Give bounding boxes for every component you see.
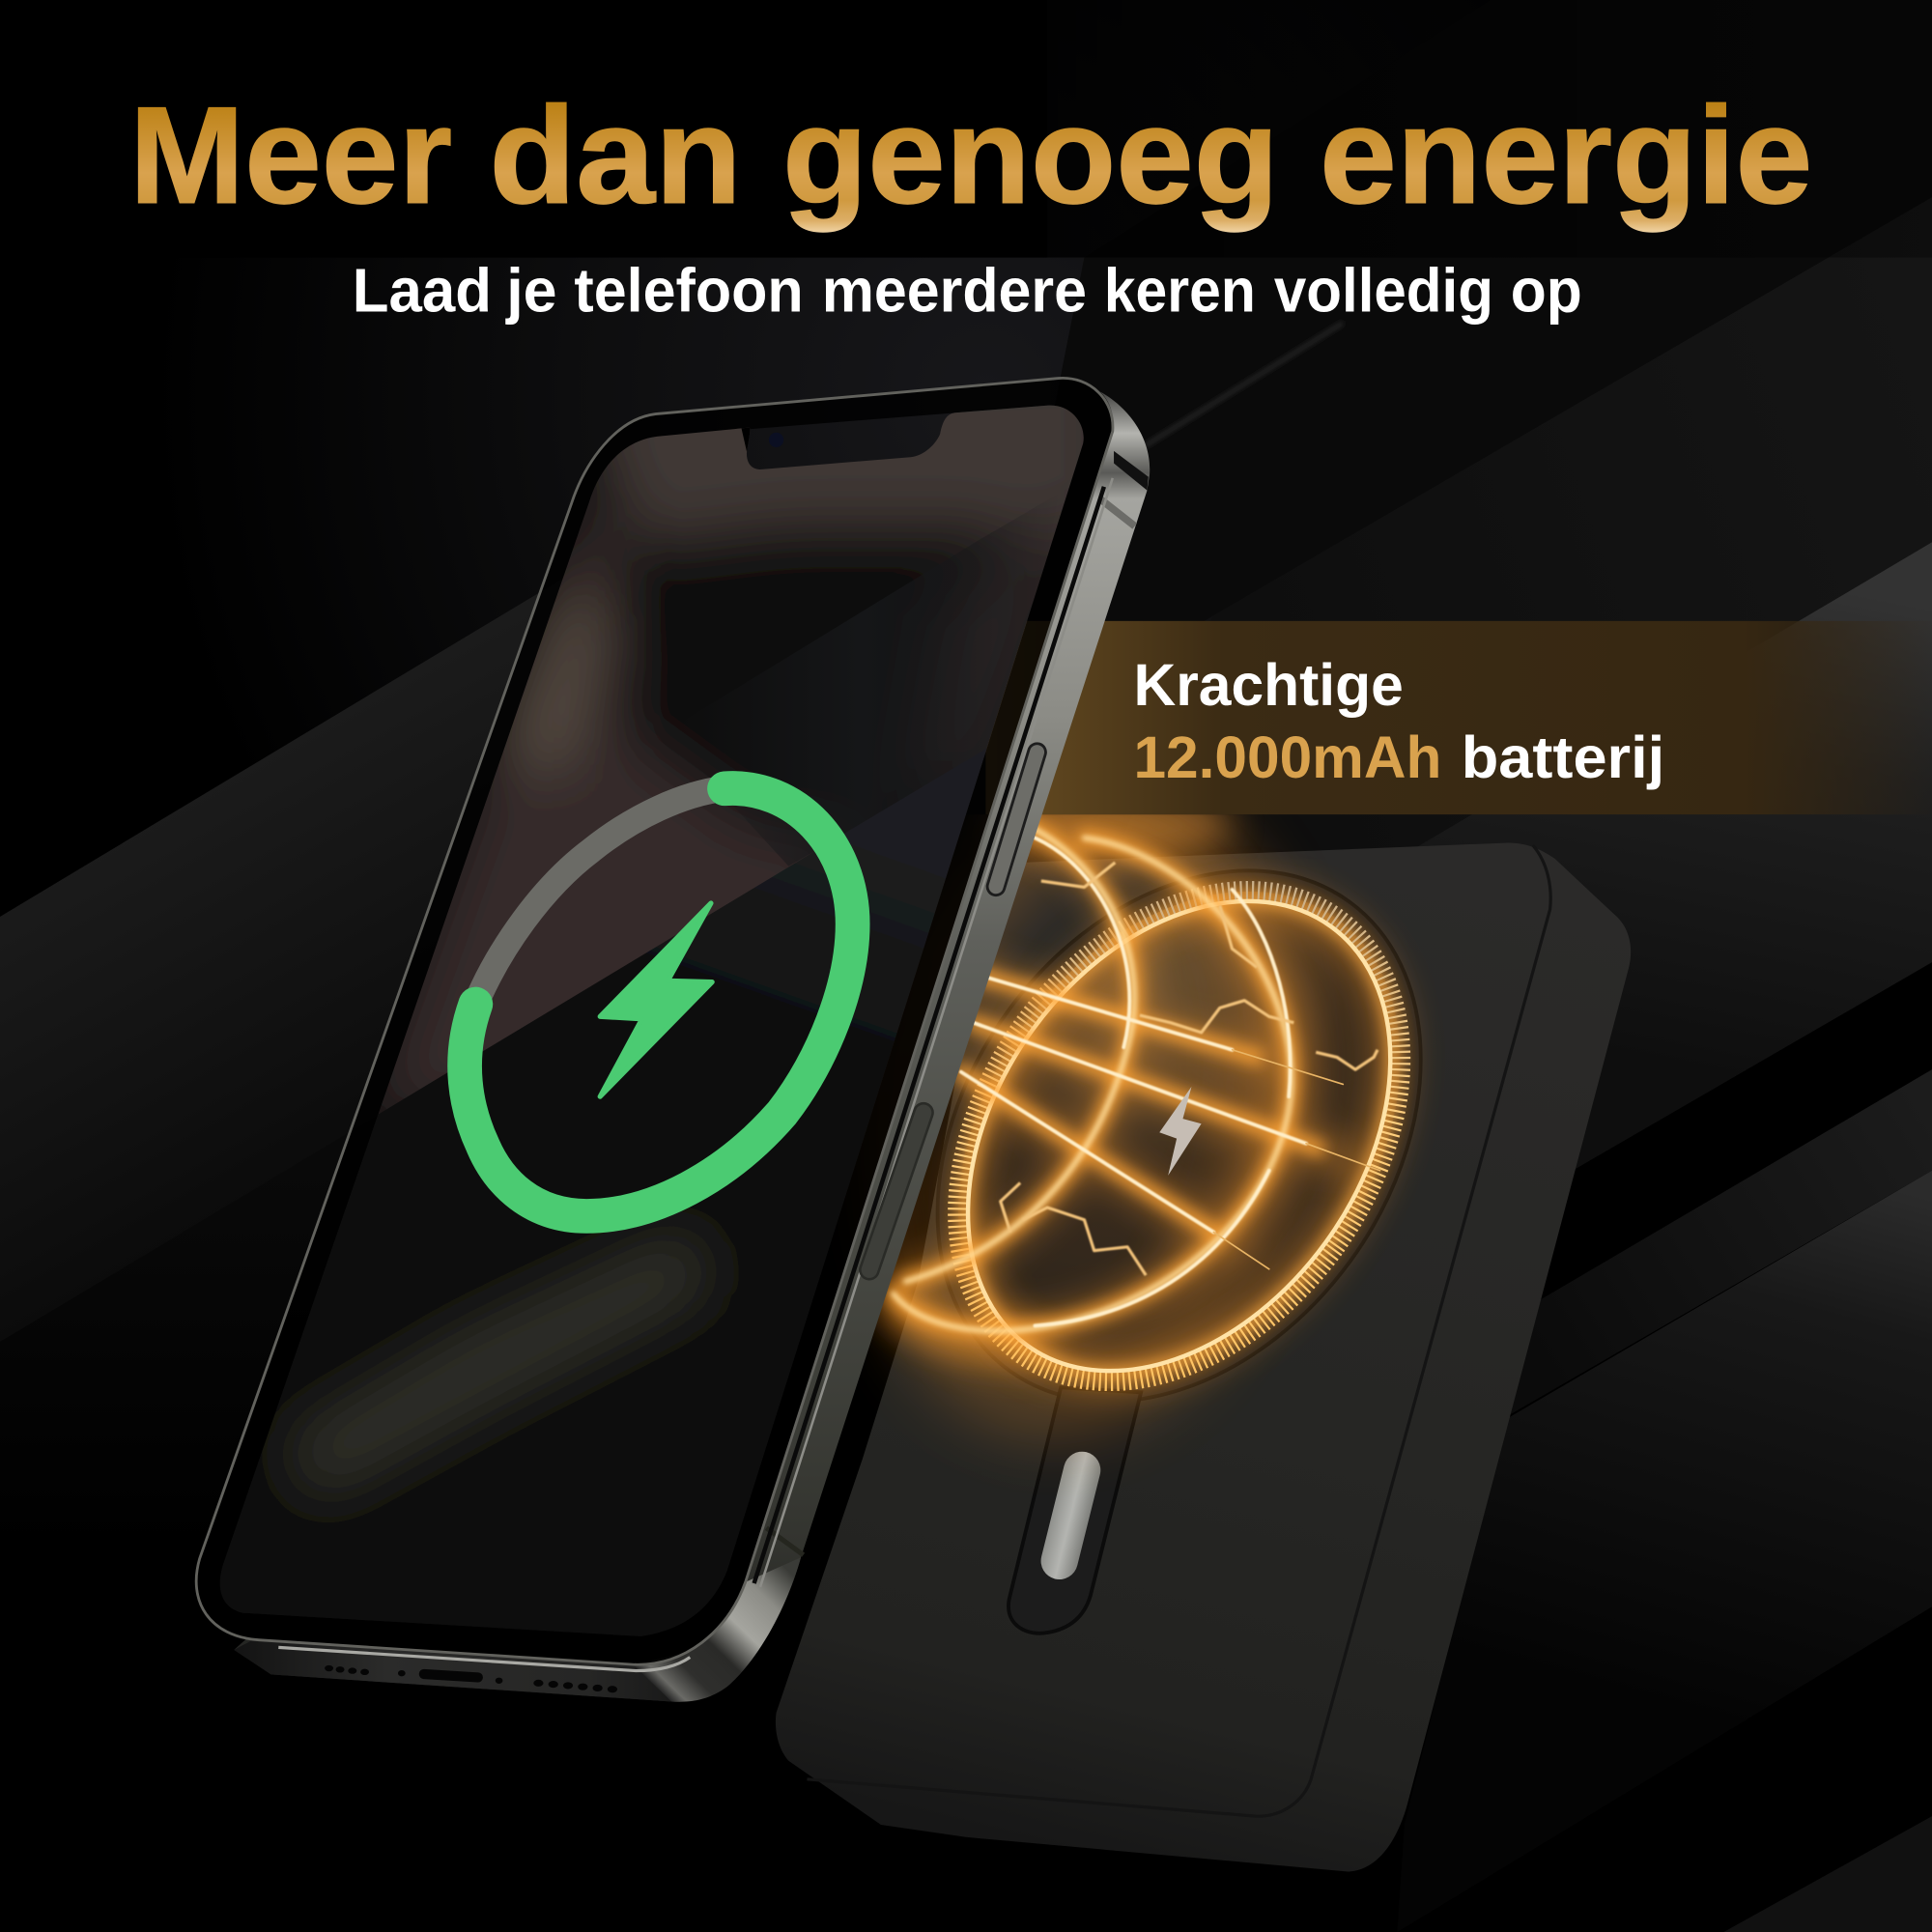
title: dan <box>489 79 742 233</box>
ring track <box>475 788 724 1005</box>
ring progress <box>465 788 853 1216</box>
antenna band bottom <box>766 1528 804 1555</box>
magnetic disc <box>838 778 1520 1494</box>
screen band mid <box>759 520 1014 866</box>
screen lower section <box>263 749 987 1522</box>
title: Meer <box>129 79 452 233</box>
charging tail <box>1009 1387 1141 1634</box>
callout line 2: batterij <box>1462 724 1664 790</box>
corner highlight <box>635 1557 801 1702</box>
banner background <box>985 621 1932 814</box>
top cap shadow <box>1114 451 1149 491</box>
smartphone <box>195 377 1150 1702</box>
rim inner dark line <box>754 487 1104 1583</box>
power button <box>985 742 1048 897</box>
front rim <box>196 378 1113 1664</box>
screen <box>220 406 1084 1636</box>
antenna band top <box>1100 499 1135 526</box>
phone side frame <box>234 392 1150 1702</box>
title: energie <box>1320 79 1812 233</box>
title <box>129 79 1812 233</box>
callout line 1: Krachtige <box>1133 652 1404 718</box>
subtitle <box>353 256 1582 326</box>
centre bolt <box>1159 1087 1202 1176</box>
speaker holes and port <box>325 1665 617 1692</box>
subtitle: volledig <box>1274 256 1493 326</box>
callout banner <box>985 621 1932 814</box>
callout highlight: 12.000mAh <box>1133 724 1441 790</box>
camera cutout <box>742 427 750 452</box>
bezel <box>196 378 1113 1664</box>
top haze <box>1024 814 1246 877</box>
subtitle: op <box>1511 256 1582 326</box>
golden energy glow <box>869 814 1430 1464</box>
subtitle: meerdere <box>822 256 1087 326</box>
subtitle: je <box>505 256 557 326</box>
power bank <box>776 778 1631 1871</box>
power bank face edge <box>807 845 1550 1816</box>
hatched ring <box>927 863 1430 1410</box>
subtitle: telefoon <box>574 256 804 326</box>
glow disc <box>958 892 1400 1360</box>
power bank body <box>776 842 1631 1872</box>
lightning streaks <box>1001 863 1378 1275</box>
bottom side <box>234 1640 690 1701</box>
screen soft brown reflections <box>379 406 1084 1115</box>
camera lens <box>769 433 783 447</box>
indicator pill <box>1037 1448 1104 1583</box>
rim light line <box>760 478 1113 1587</box>
lightning bolt <box>600 903 712 1096</box>
bottom rim highlight <box>278 1647 690 1671</box>
energy arcs <box>894 823 1380 1331</box>
volume button <box>858 1101 935 1282</box>
lower left bloom <box>894 1293 1047 1350</box>
title: genoeg <box>782 79 1279 233</box>
outer haze <box>851 785 1318 1433</box>
charging ring on screen <box>465 788 853 1216</box>
subtitle: Laad <box>353 256 492 326</box>
subtitle: keren <box>1104 256 1256 326</box>
